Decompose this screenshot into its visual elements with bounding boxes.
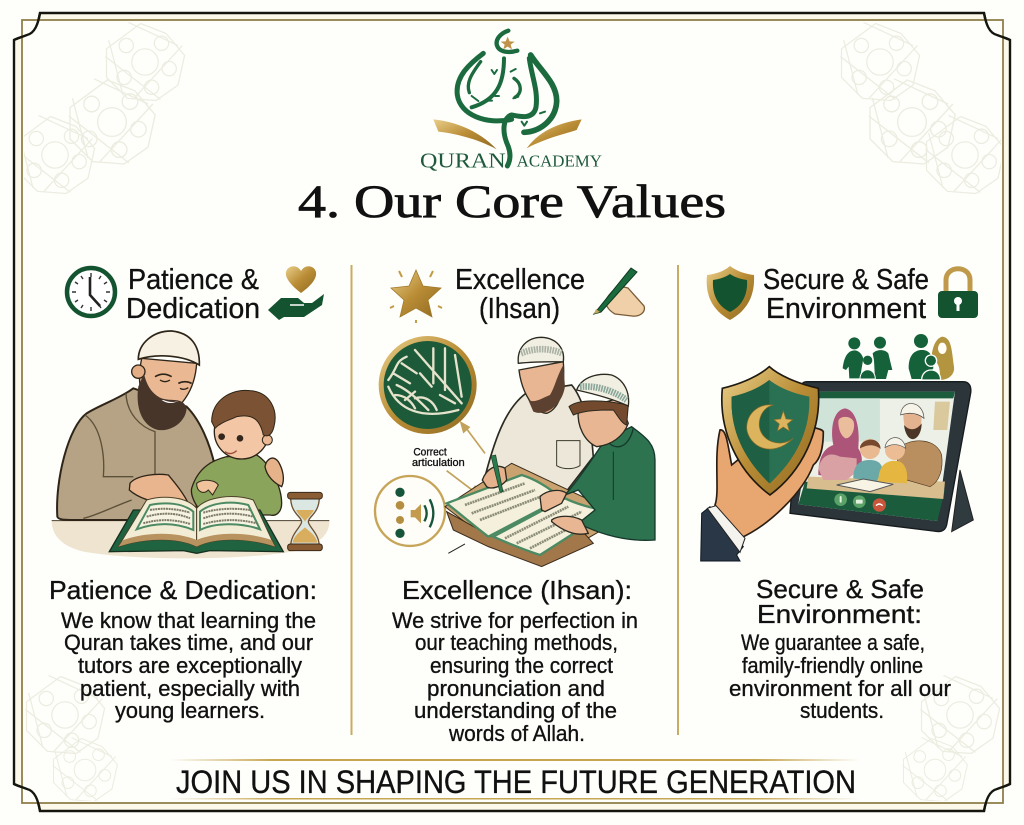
sound circle [375, 476, 445, 546]
icon: heart in hand [268, 266, 324, 320]
calligraphy medallion [379, 336, 477, 434]
label: correct articulation: articulation [412, 457, 465, 469]
heading: Excellence Ihsan: Excellence [455, 264, 585, 296]
text: patience and dedication: Patience & Dedication: [49, 575, 317, 605]
divider left [350, 265, 352, 735]
text: patience and dedication: tutors are exceptionally [78, 653, 302, 678]
child hand [197, 480, 218, 495]
text: excellence [392, 575, 638, 746]
logo wordmark [420, 150, 602, 172]
logo wordmark: QURAN [420, 150, 506, 172]
book on table [837, 479, 893, 492]
tablet stand [952, 470, 973, 532]
child hair [212, 390, 275, 436]
text: excellence: Excellence (Ihsan): [402, 575, 632, 605]
heading: Patience & Dedication: Patience & [128, 264, 259, 296]
hourglass [291, 497, 319, 547]
tutor robe seams [83, 393, 155, 518]
open book [109, 510, 283, 553]
text: excellence: pronunciation and [427, 676, 605, 701]
student [565, 427, 655, 540]
tutor cap [138, 331, 199, 365]
logo wordmark: ACADEMY [517, 152, 602, 171]
heading: Excellence Ihsan: (Ihsan) [479, 293, 560, 325]
heading: Excellence Ihsan [455, 264, 585, 325]
logo star [501, 37, 515, 49]
text: secure and safe: students. [800, 698, 884, 723]
child body [191, 455, 282, 515]
tablet [790, 382, 971, 532]
student hands [540, 490, 588, 534]
tutor body [57, 388, 215, 520]
shield [722, 367, 819, 495]
text: excellence: We strive for perfection in [392, 608, 638, 633]
icon: clock [67, 268, 115, 316]
heading: Secure and Safe Environment: Secure & Safe [763, 264, 929, 296]
tutor hand with pen [482, 455, 507, 492]
suit cuff [701, 507, 743, 561]
text: excellence: understanding of the [414, 698, 617, 723]
children [853, 460, 882, 482]
panel: patience and dedication [49, 264, 329, 723]
hand [715, 425, 823, 538]
text: patience and dedication: patient, especially with [80, 676, 300, 701]
arrows [447, 423, 485, 553]
logo calligraphy [457, 31, 557, 166]
text: patience and dedication: young learners. [115, 698, 265, 723]
text: excellence: ensuring the correct [430, 653, 613, 678]
icon: gold star [390, 270, 442, 323]
illustration: secure family video call [701, 334, 973, 561]
illustration: tutor and child reading [52, 331, 329, 558]
logo gold swooshes [433, 119, 582, 149]
text: secure and safe: family-friendly online [742, 653, 923, 678]
heading: Patience & Dedication: Dedication [126, 293, 260, 325]
text: secure and safe [729, 574, 951, 723]
icon: shield [707, 266, 754, 320]
text: excellence: our teaching methods, [415, 630, 618, 655]
panel: excellence [375, 264, 655, 746]
logo: Quran Academy [420, 31, 602, 172]
heading: Secure and Safe Environment [763, 264, 929, 325]
label: correct articulation [412, 446, 465, 469]
divider right [677, 265, 679, 735]
title: 4. Our Core Values [298, 176, 726, 228]
heading: Patience & Dedication [126, 264, 260, 325]
tutor head [140, 358, 197, 415]
tutor pointing hand [129, 474, 188, 503]
text: patience and dedication: We know that learning the [61, 608, 316, 633]
mother [818, 408, 862, 479]
icon: padlock [938, 269, 978, 318]
label: correct articulation: Correct [413, 446, 447, 458]
father [897, 441, 942, 487]
text: secure and safe: environment for all our [729, 676, 951, 701]
tutor beard [138, 373, 187, 430]
table [52, 521, 329, 558]
child silhouette [922, 355, 941, 380]
text: secure and safe: We guarantee a safe, [741, 630, 925, 655]
panel: secure and safe [701, 264, 978, 723]
woman silhouette [932, 337, 954, 380]
screen [798, 392, 955, 521]
icon: hand with pen [594, 268, 644, 316]
call buttons [834, 493, 886, 512]
heading: Secure and Safe Environment: Environment [766, 293, 926, 325]
tutor hand on child shoulder [265, 458, 283, 487]
text: excellence: words of Allah. [448, 721, 585, 746]
illustration: tutor and student with book [375, 336, 655, 567]
tutor [483, 385, 593, 493]
text: secure and safe: Environment: [757, 599, 922, 629]
child head [214, 404, 269, 459]
open book [445, 463, 625, 565]
text: patience and dedication [49, 575, 317, 723]
text: patience and dedication: Quran takes time, and our [64, 630, 313, 655]
text: secure and safe: Secure & Safe [756, 574, 924, 604]
footer text: JOIN US IN SHAPING THE FUTURE GENERATION [176, 764, 856, 800]
family icons [843, 334, 933, 379]
